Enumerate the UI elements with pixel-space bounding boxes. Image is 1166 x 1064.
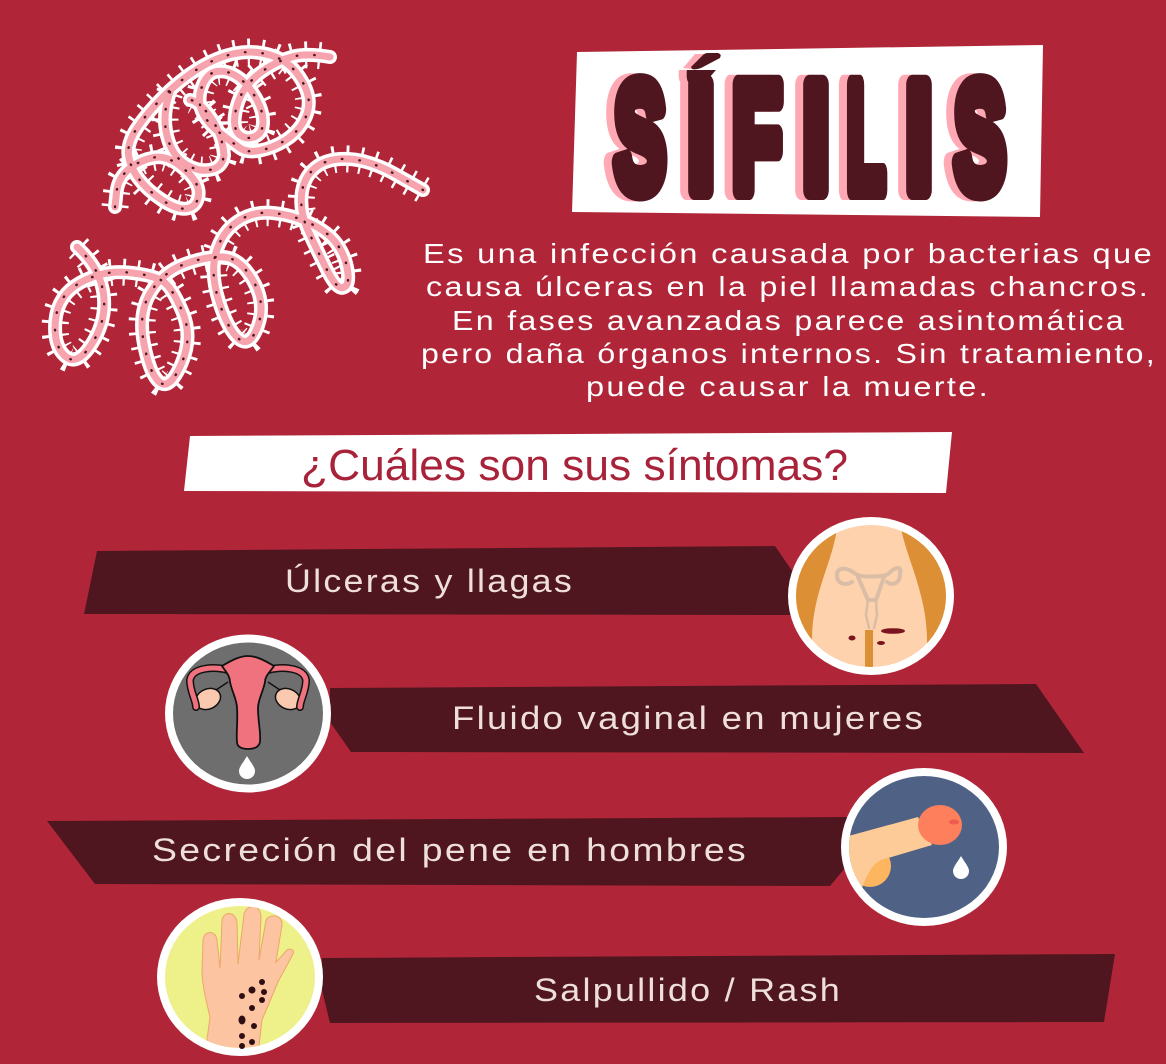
description paragraph: En fases avanzadas parece asintomática	[452, 305, 1126, 336]
ribbon: Úlceras y llagas: Úlceras y llagas	[285, 563, 574, 599]
title banner: SÍFILIS: I	[795, 51, 821, 223]
title banner: SÍFILIS: Í	[688, 51, 716, 223]
title banner: SÍFILIS: S	[606, 52, 658, 223]
title banner: SÍFILIS	[572, 45, 1043, 223]
ribbon: Fluido vaginal en mujeres	[330, 684, 1084, 753]
icon: pelvis with ulcers	[788, 517, 954, 680]
title banner: SÍFILIS: S	[954, 52, 1006, 223]
title banner: SÍFILIS: F	[732, 51, 782, 223]
icon: penis with discharge	[841, 768, 1007, 926]
ribbon: Úlceras y llagas	[84, 546, 812, 615]
description paragraph	[421, 238, 1157, 402]
illustration: spirochete bacteria	[55, 52, 423, 384]
title banner: SÍFILIS: S	[614, 52, 666, 223]
heading: symptoms: ¿Cuáles son sus síntomas?	[301, 441, 848, 490]
ribbon: Secreción del pene en hombres: Secreción del pene en hombres	[152, 832, 748, 868]
icon: uterus with discharge	[165, 634, 331, 792]
title banner: SÍFILIS: F	[724, 51, 774, 223]
description paragraph: Es una infección causada por bacterias que	[423, 238, 1154, 269]
title banner: SÍFILIS: Í	[680, 51, 708, 223]
title banner: SÍFILIS: I	[898, 51, 924, 223]
ribbon: Salpullido / Rash: Salpullido / Rash	[534, 972, 842, 1008]
title banner: SÍFILIS: L	[839, 51, 877, 223]
title banner: SÍFILIS: S	[946, 52, 998, 223]
ribbon: Salpullido / Rash	[322, 954, 1115, 1023]
ribbon: Secreción del pene en hombres	[47, 817, 860, 886]
description paragraph: puede causar la muerte.	[586, 371, 990, 402]
heading: symptoms	[184, 432, 952, 493]
ribbon: Fluido vaginal en mujeres: Fluido vaginal en mujeres	[452, 700, 925, 736]
title banner: SÍFILIS: L	[847, 51, 885, 223]
title banner: SÍFILIS: I	[906, 51, 932, 223]
description paragraph: pero daña órganos internos. Sin tratamiento,	[421, 338, 1157, 369]
description paragraph: causa úlceras en la piel llamadas chancros.	[426, 271, 1150, 302]
icon: hand with rash	[157, 898, 323, 1056]
title banner: SÍFILIS: I	[803, 51, 829, 223]
